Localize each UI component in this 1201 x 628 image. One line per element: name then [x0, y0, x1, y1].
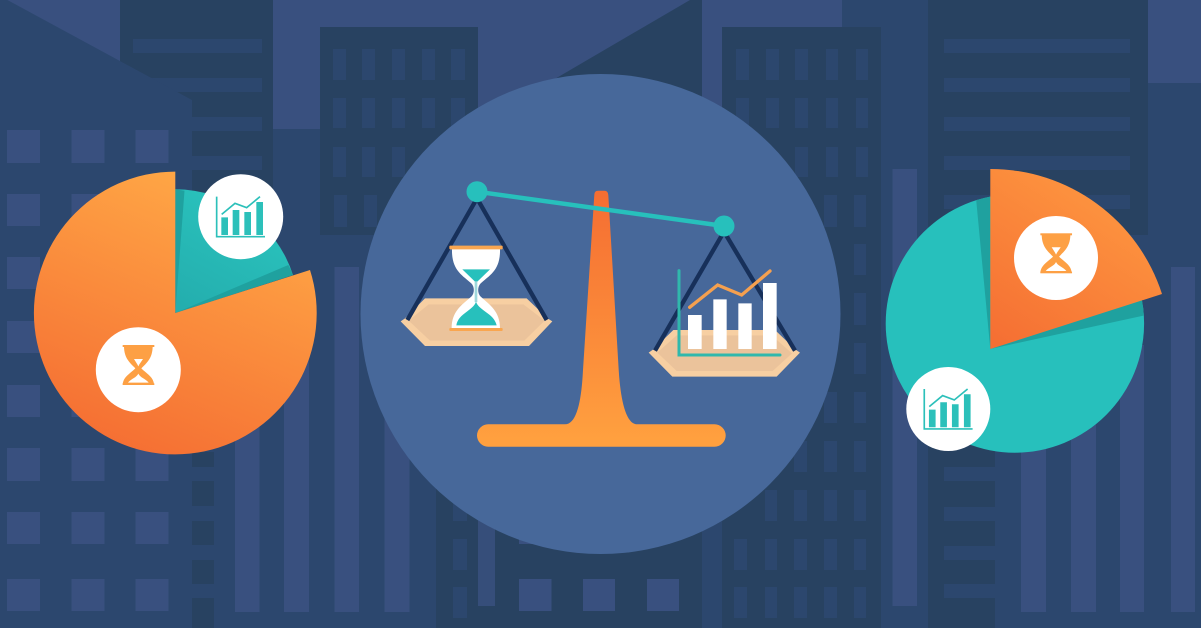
icon: hourglass badge [1014, 216, 1098, 300]
slice shadow [976, 196, 1144, 349]
orange slice [990, 169, 1162, 349]
left pie chart [34, 172, 317, 454]
teal slice [175, 189, 293, 313]
icon: bar chart badge [198, 174, 283, 259]
icon: bar chart on right pan [679, 271, 780, 355]
orange slice [34, 172, 317, 454]
teal disc [886, 194, 1144, 453]
building: striped right tower [928, 0, 1148, 628]
building: striped left tower [120, 0, 273, 628]
building: dark roof slope behind centre [500, 0, 702, 300]
right pie chart [886, 169, 1162, 453]
vertical light bars, left [235, 267, 410, 612]
building: tall window tower, left of centre [320, 27, 478, 235]
balance scale [401, 181, 800, 447]
right pan [649, 232, 800, 377]
icon: hourglass on left pan [449, 246, 503, 331]
scale post and base [477, 191, 726, 447]
left pan with hourglass [401, 198, 552, 346]
centre circle [360, 74, 840, 554]
building: tall window tower, right of centre [722, 27, 881, 628]
scale beam [466, 181, 734, 236]
building: left block with square windows [0, 0, 192, 628]
vertical light bars, right [892, 169, 1195, 612]
icon: hourglass badge [96, 327, 181, 412]
building: lower centre block [436, 400, 702, 628]
icon: bar chart badge [906, 367, 990, 451]
